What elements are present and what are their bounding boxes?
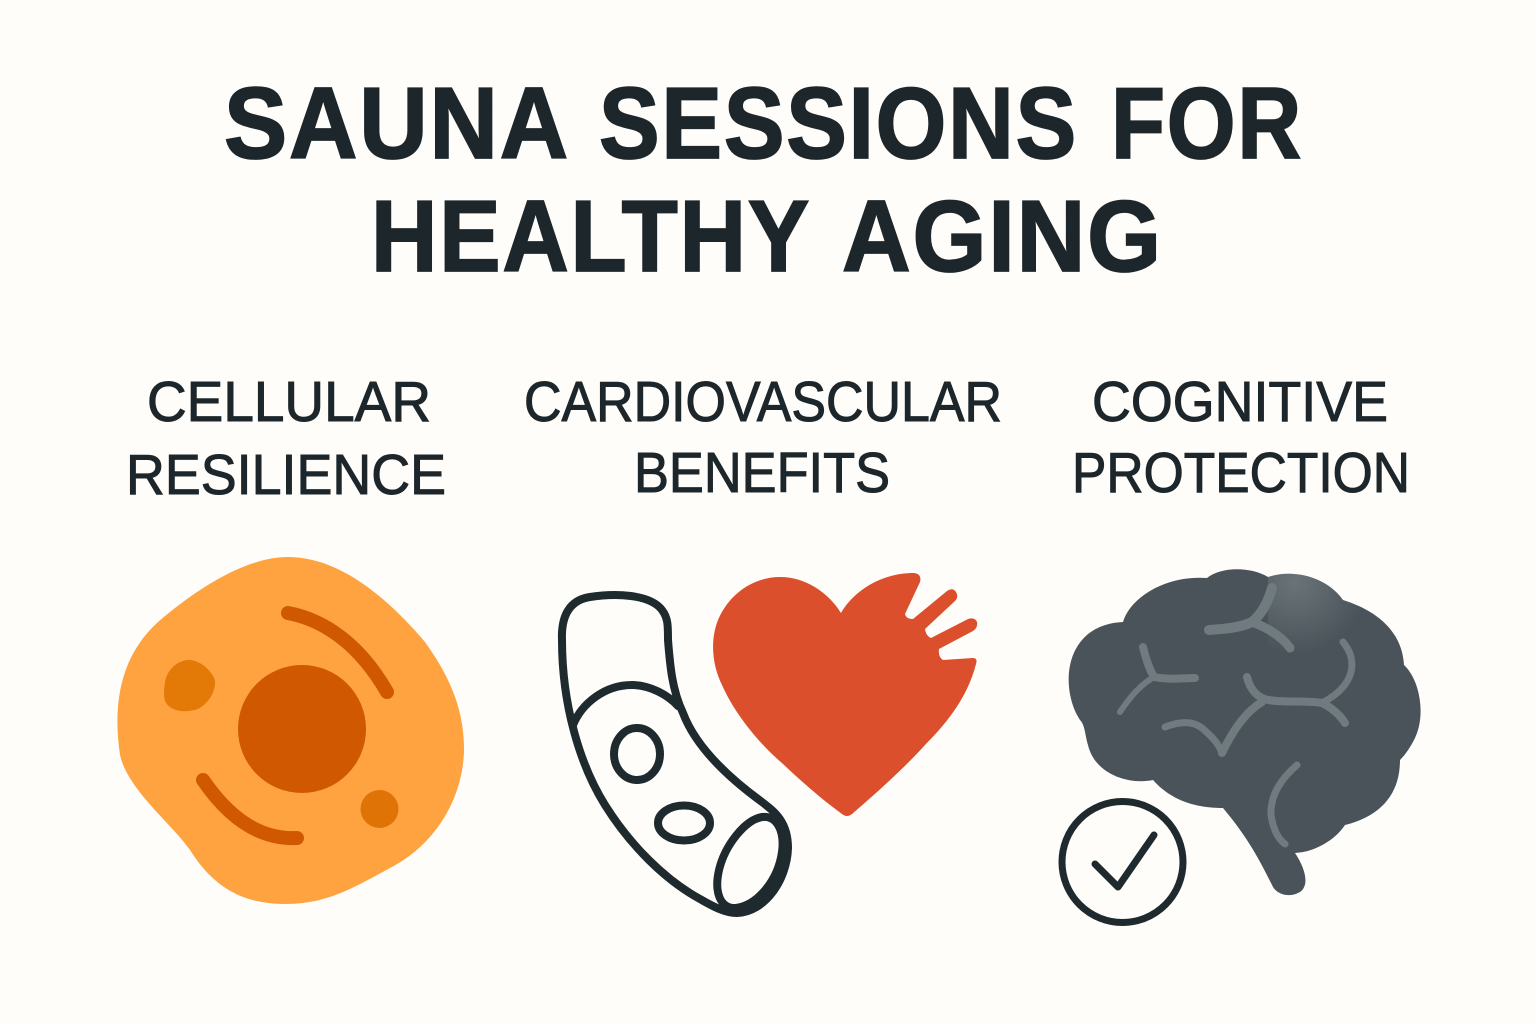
- icon: cell: [117, 557, 464, 904]
- vessel inner wall: [573, 685, 678, 725]
- brain highlight: [1268, 574, 1404, 665]
- upper curved organelle: [288, 613, 387, 692]
- cell body: [117, 557, 464, 904]
- nucleus: [238, 665, 366, 793]
- title: SAUNA: [224, 68, 570, 180]
- vessel outer wall: [562, 595, 788, 913]
- vessel opening: [717, 817, 783, 908]
- icon: blood vessel: [562, 595, 788, 913]
- lower curved organelle: [203, 780, 297, 838]
- heading: cognitive protection: [1072, 370, 1410, 505]
- icon: brain: [1069, 569, 1421, 895]
- organelle right: [360, 790, 398, 828]
- heading: cardiovascular benefits: BENEFITS: [634, 441, 890, 505]
- title: SESSIONS: [599, 68, 1078, 180]
- icon: check badge: [1062, 802, 1183, 922]
- brain body: [1069, 569, 1421, 895]
- title: FOR: [1111, 68, 1303, 180]
- heading: cellular resilience: RESILIENCE: [126, 443, 446, 507]
- organelle left: [164, 660, 215, 711]
- heading: cognitive protection: COGNITIVE: [1092, 370, 1388, 434]
- icon: heart: [713, 573, 977, 816]
- heading: cellular resilience: [126, 370, 446, 507]
- blood cell upper: [614, 728, 660, 780]
- title: [224, 68, 1303, 293]
- heading: cardiovascular benefits: CARDIOVASCULAR: [524, 370, 1002, 434]
- title: HEALTHY: [371, 181, 811, 293]
- blood cell lower: [658, 806, 710, 840]
- heading: cardiovascular benefits: [524, 370, 1002, 505]
- brain folds: [1120, 588, 1352, 844]
- heading: cognitive protection: PROTECTION: [1072, 441, 1410, 505]
- title: AGING: [842, 181, 1163, 293]
- heading: cellular resilience: CELLULAR: [147, 370, 431, 434]
